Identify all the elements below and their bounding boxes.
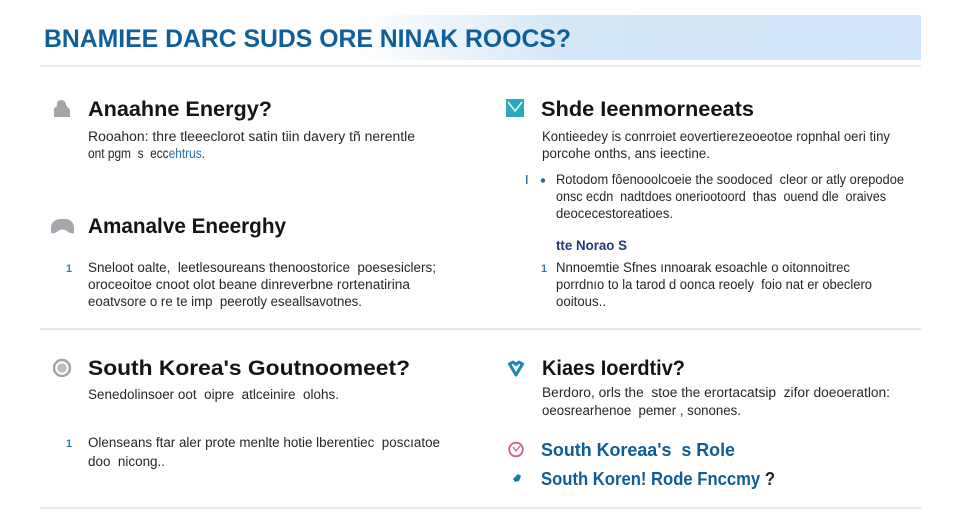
icon: speech cloud	[51, 219, 74, 233]
text block: government bullet: Olenseans ftar aler prote menlte hotie lberentiec poscıatoe	[88, 435, 440, 450]
panel: bottom left government	[54, 357, 440, 469]
text block: government description: Senedolinsoer oot oipre atlceinire olohs.	[88, 387, 339, 402]
text block: first bullet: Rotodom fôenooolcoeie the soodoced cleor or atly orepodoe	[556, 172, 904, 187]
text block: developments intro	[542, 129, 890, 161]
list number: 1	[541, 263, 547, 275]
text block: government bullet	[88, 435, 440, 469]
bullet	[541, 178, 545, 183]
icon: teal envelope	[506, 99, 524, 117]
text block: second bullet: porrdnıo to la tarod d oonca reoely foio nat er obeclero	[556, 277, 872, 292]
text block: developments intro: Kontieedey is conrroiet eovertierezeoeotoe ropnhal oeri tiny	[542, 129, 890, 144]
text block: first energy description: Rooahon: thre tleeeclorot satin tiin davery tñ nerentle	[88, 129, 415, 144]
icon: pink clock	[509, 443, 523, 456]
heading: role question: Kiaes Ioerdtiv?	[542, 357, 685, 380]
text block: second energy description	[88, 260, 436, 309]
text block: first energy description: ont pgm s eccehtrus.	[88, 146, 205, 161]
marker	[526, 175, 528, 184]
title banner: BNAMIEE DARC SUDS ORE NINAK ROOCS?	[44, 25, 571, 53]
heading: first energy question: Anaahne Energy?	[88, 98, 272, 121]
text block: first bullet: deocecestoreatioes.	[556, 206, 673, 221]
panel: top right developments	[506, 98, 904, 309]
text block: second bullet: Nnnoemtie Sfnes ınnoarak esoachle o oitonnoitrec	[556, 260, 850, 275]
heading: second energy question: Amanalve Eneerghy	[88, 215, 286, 238]
text block: first bullet: onsc ecdn nadtdoes oneriootoord thas ouend dle oraives	[556, 189, 886, 204]
text block: second energy description: Sneloot oalte, leetlesoureans thenoostorice poesesiclers;	[88, 260, 436, 275]
link heading: role: South Koreaa's s Role	[541, 439, 735, 460]
subheading: tte Norao S	[556, 238, 627, 253]
text block: second energy description: eoatvsore o re te imp peerotly eseallsavotnes.	[88, 294, 362, 309]
link heading: policy: South Koren! Rode Fnccmy ?	[541, 468, 775, 489]
panel: middle left energy	[51, 215, 436, 309]
panel: top left definition	[54, 98, 415, 161]
list number: 1	[66, 263, 72, 275]
text block: developments intro: porcohe onths, ans ieectine.	[542, 146, 710, 161]
text block: government bullet: doo nicong..	[88, 454, 165, 469]
text block: first bullet	[556, 172, 904, 221]
heading: developments: Shde Ieenmorneeats	[541, 98, 754, 121]
icon: person	[54, 100, 70, 117]
icon: teal dot	[513, 474, 521, 482]
icon: grey ring	[54, 360, 70, 376]
text block: second bullet	[556, 260, 872, 309]
text block: second bullet: ooitous..	[556, 294, 606, 309]
list number: 1	[66, 438, 72, 450]
text block: role description: Berdoro, orls the stoe the erortacatsip zifor doeoeratlon:	[542, 385, 890, 400]
text block: role description	[542, 385, 890, 418]
text block: role description: oeosrearhenoe pemer , sonones.	[542, 403, 741, 418]
text block: second energy description: oroceoitoe cnoot olot beane dinreverbne rortenatirina	[88, 277, 410, 292]
text block: first energy description	[88, 129, 415, 161]
panel: bottom right role	[509, 357, 890, 489]
heading: government question: South Korea's Goutnoomeet?	[88, 357, 410, 380]
title banner	[40, 15, 921, 60]
icon: blue shield heart	[510, 362, 522, 375]
